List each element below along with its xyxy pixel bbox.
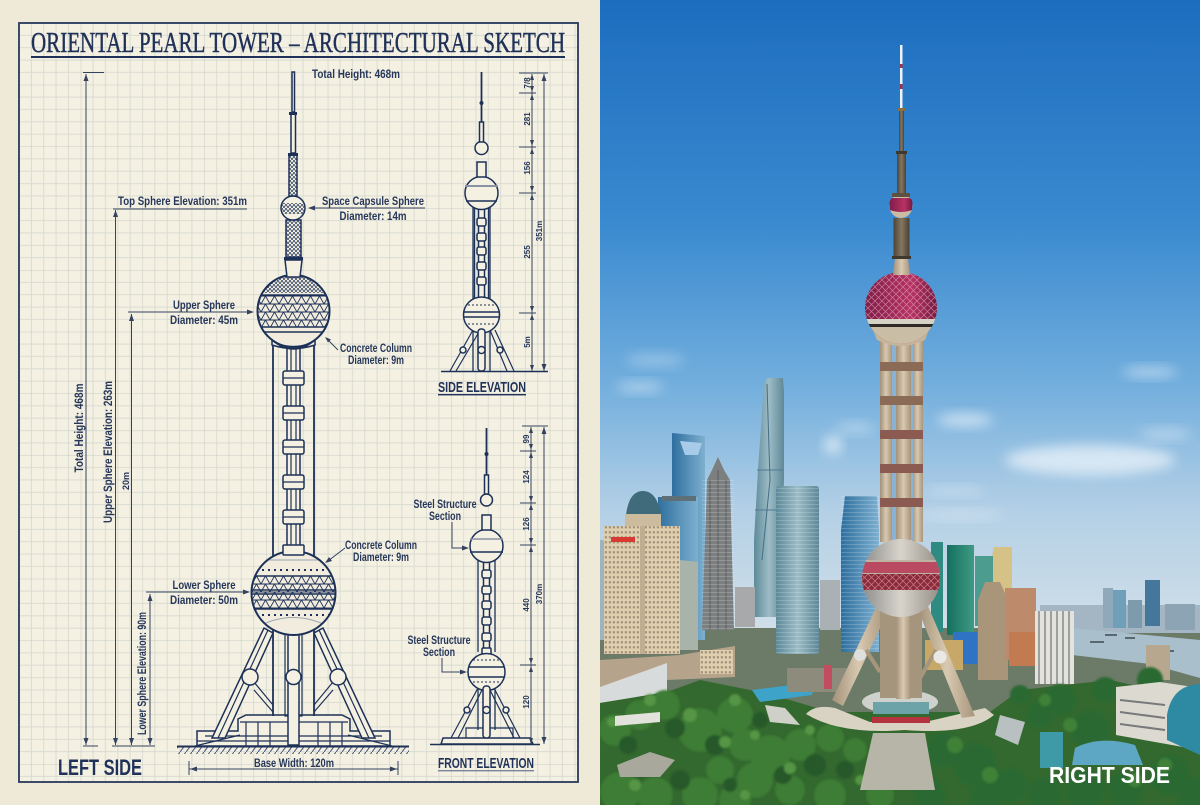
front dimensions: 124 (522, 470, 531, 484)
ground foliage base (600, 680, 1200, 805)
cream dome hotel (626, 491, 661, 515)
front dimensions: 126 (522, 517, 531, 531)
panel: photograph illustration (right side) (599, 0, 1200, 805)
east riverside buildings (1040, 682, 1200, 768)
side dimensions: 255 (523, 245, 532, 259)
Shanghai Tower (754, 378, 784, 617)
label: front elevation: FRONT ELEVATION (438, 755, 534, 772)
dimension: lower sphere: Lower Sphere (172, 578, 236, 592)
dimension: upper sphere: 20m (121, 472, 131, 490)
callout: lower concrete column (325, 538, 417, 564)
spire, mast and space module (890, 45, 912, 275)
label: right side: RIGHT SIDE (1049, 762, 1170, 788)
callout: upper steel structure section (414, 497, 477, 550)
callout: space capsule sphere (308, 194, 425, 223)
dimension: lower sphere: Lower Sphere Elevation: 90m (135, 612, 149, 735)
ground hatch (177, 746, 409, 754)
skyline: Lujiazui towers (600, 378, 879, 703)
dimension: upper sphere: Upper Sphere (173, 298, 235, 312)
Shanghai World Financial Center (672, 433, 705, 640)
dimension: total height: Total Height: 468m (72, 384, 86, 472)
panel: blueprint sketch (left side) (18, 22, 579, 783)
dimension: lower sphere (135, 578, 250, 745)
front dimensions (520, 426, 548, 744)
dimension: lower sphere: Diameter: 50m (170, 593, 238, 607)
label: left side: LEFT SIDE (58, 755, 142, 780)
base and podium (195, 715, 392, 746)
title: ORIENTAL PEARL TOWER – ARCHITECTURAL SKETCH (31, 27, 565, 59)
side tower (441, 72, 548, 372)
park trees (599, 667, 1200, 805)
clouds (616, 354, 1191, 519)
callout: lower steel structure section (408, 633, 471, 674)
callout: lower concrete column: Concrete Column (345, 538, 417, 552)
lower columns (880, 610, 922, 698)
shaft columns (880, 335, 923, 542)
drawing: front elevation (408, 426, 548, 772)
dimension: upper sphere (121, 298, 254, 745)
tower base ring (806, 690, 994, 731)
upper sphere (256, 275, 332, 349)
front dimensions: 120 (522, 695, 531, 709)
outer columns (273, 345, 314, 716)
callout: total height: Total Height: 468m (312, 67, 400, 81)
plaza paths (615, 665, 1025, 790)
callout: upper concrete column (325, 337, 412, 367)
slanted legs (832, 606, 975, 718)
front dimensions: 370m (535, 584, 544, 604)
side dimensions: 5m (523, 336, 532, 348)
mid-height glass towers (776, 486, 819, 654)
far skyline and river (1040, 580, 1200, 678)
central column (285, 626, 302, 745)
callout: lower steel structure section: Section (423, 645, 455, 659)
callout: lower steel structure section: Steel Structure (408, 633, 471, 647)
sky (600, 0, 1200, 640)
dimension: top sphere elevation: Top Sphere Elevation: 351m (118, 194, 247, 208)
center column (896, 610, 910, 699)
rounded glass building (658, 497, 698, 562)
front dimensions: 99 (522, 434, 531, 443)
midground base (600, 628, 1200, 712)
slanted legs (212, 628, 375, 738)
drawing: side elevation (438, 72, 548, 396)
lower sphere (860, 538, 942, 618)
label: front elevation (438, 755, 534, 772)
front tower (430, 428, 540, 744)
Oriental Pearl Tower photo (806, 45, 994, 731)
callout: upper concrete column: Diameter: 9m (348, 353, 404, 367)
drawing: main tower elevation (177, 72, 409, 754)
low podium buildings (600, 646, 735, 687)
side dimensions: 7/8 (523, 77, 532, 89)
spire and capsule (281, 72, 305, 277)
dimension: top sphere elevation: Upper Sphere Elevation: 263m (101, 381, 115, 523)
central stem with pods (283, 345, 304, 555)
callout: space capsule sphere: Diameter: 14m (340, 209, 406, 223)
paper background (0, 0, 600, 805)
side dimensions: 281 (523, 112, 532, 126)
dimension: base width: Base Width: 120m (254, 756, 334, 770)
callout: lower concrete column: Diameter: 9m (353, 550, 409, 564)
side dimensions: 156 (523, 161, 532, 175)
graph paper grid (19, 23, 578, 782)
lower sphere (250, 551, 338, 635)
callout: upper steel structure section: Steel Structure (414, 497, 477, 511)
dimension: base width (189, 756, 398, 775)
side dimensions: 351m (535, 221, 544, 241)
front dimensions: 440 (522, 598, 531, 612)
skyline: east side buildings (925, 542, 1170, 684)
Jin Mao Tower (702, 457, 734, 630)
callout: upper concrete column: Concrete Column (340, 341, 412, 355)
label: side elevation: SIDE ELEVATION (438, 379, 526, 396)
dimension: top sphere elevation (101, 194, 247, 746)
callout: upper steel structure section: Section (429, 509, 461, 523)
upper sphere (864, 272, 938, 347)
side dimensions (519, 73, 548, 371)
sheet frame (19, 23, 578, 782)
callout: space capsule sphere: Space Capsule Sphere (322, 194, 424, 208)
dimension: upper sphere: Diameter: 45m (170, 313, 238, 327)
dimension: total height (72, 72, 104, 746)
